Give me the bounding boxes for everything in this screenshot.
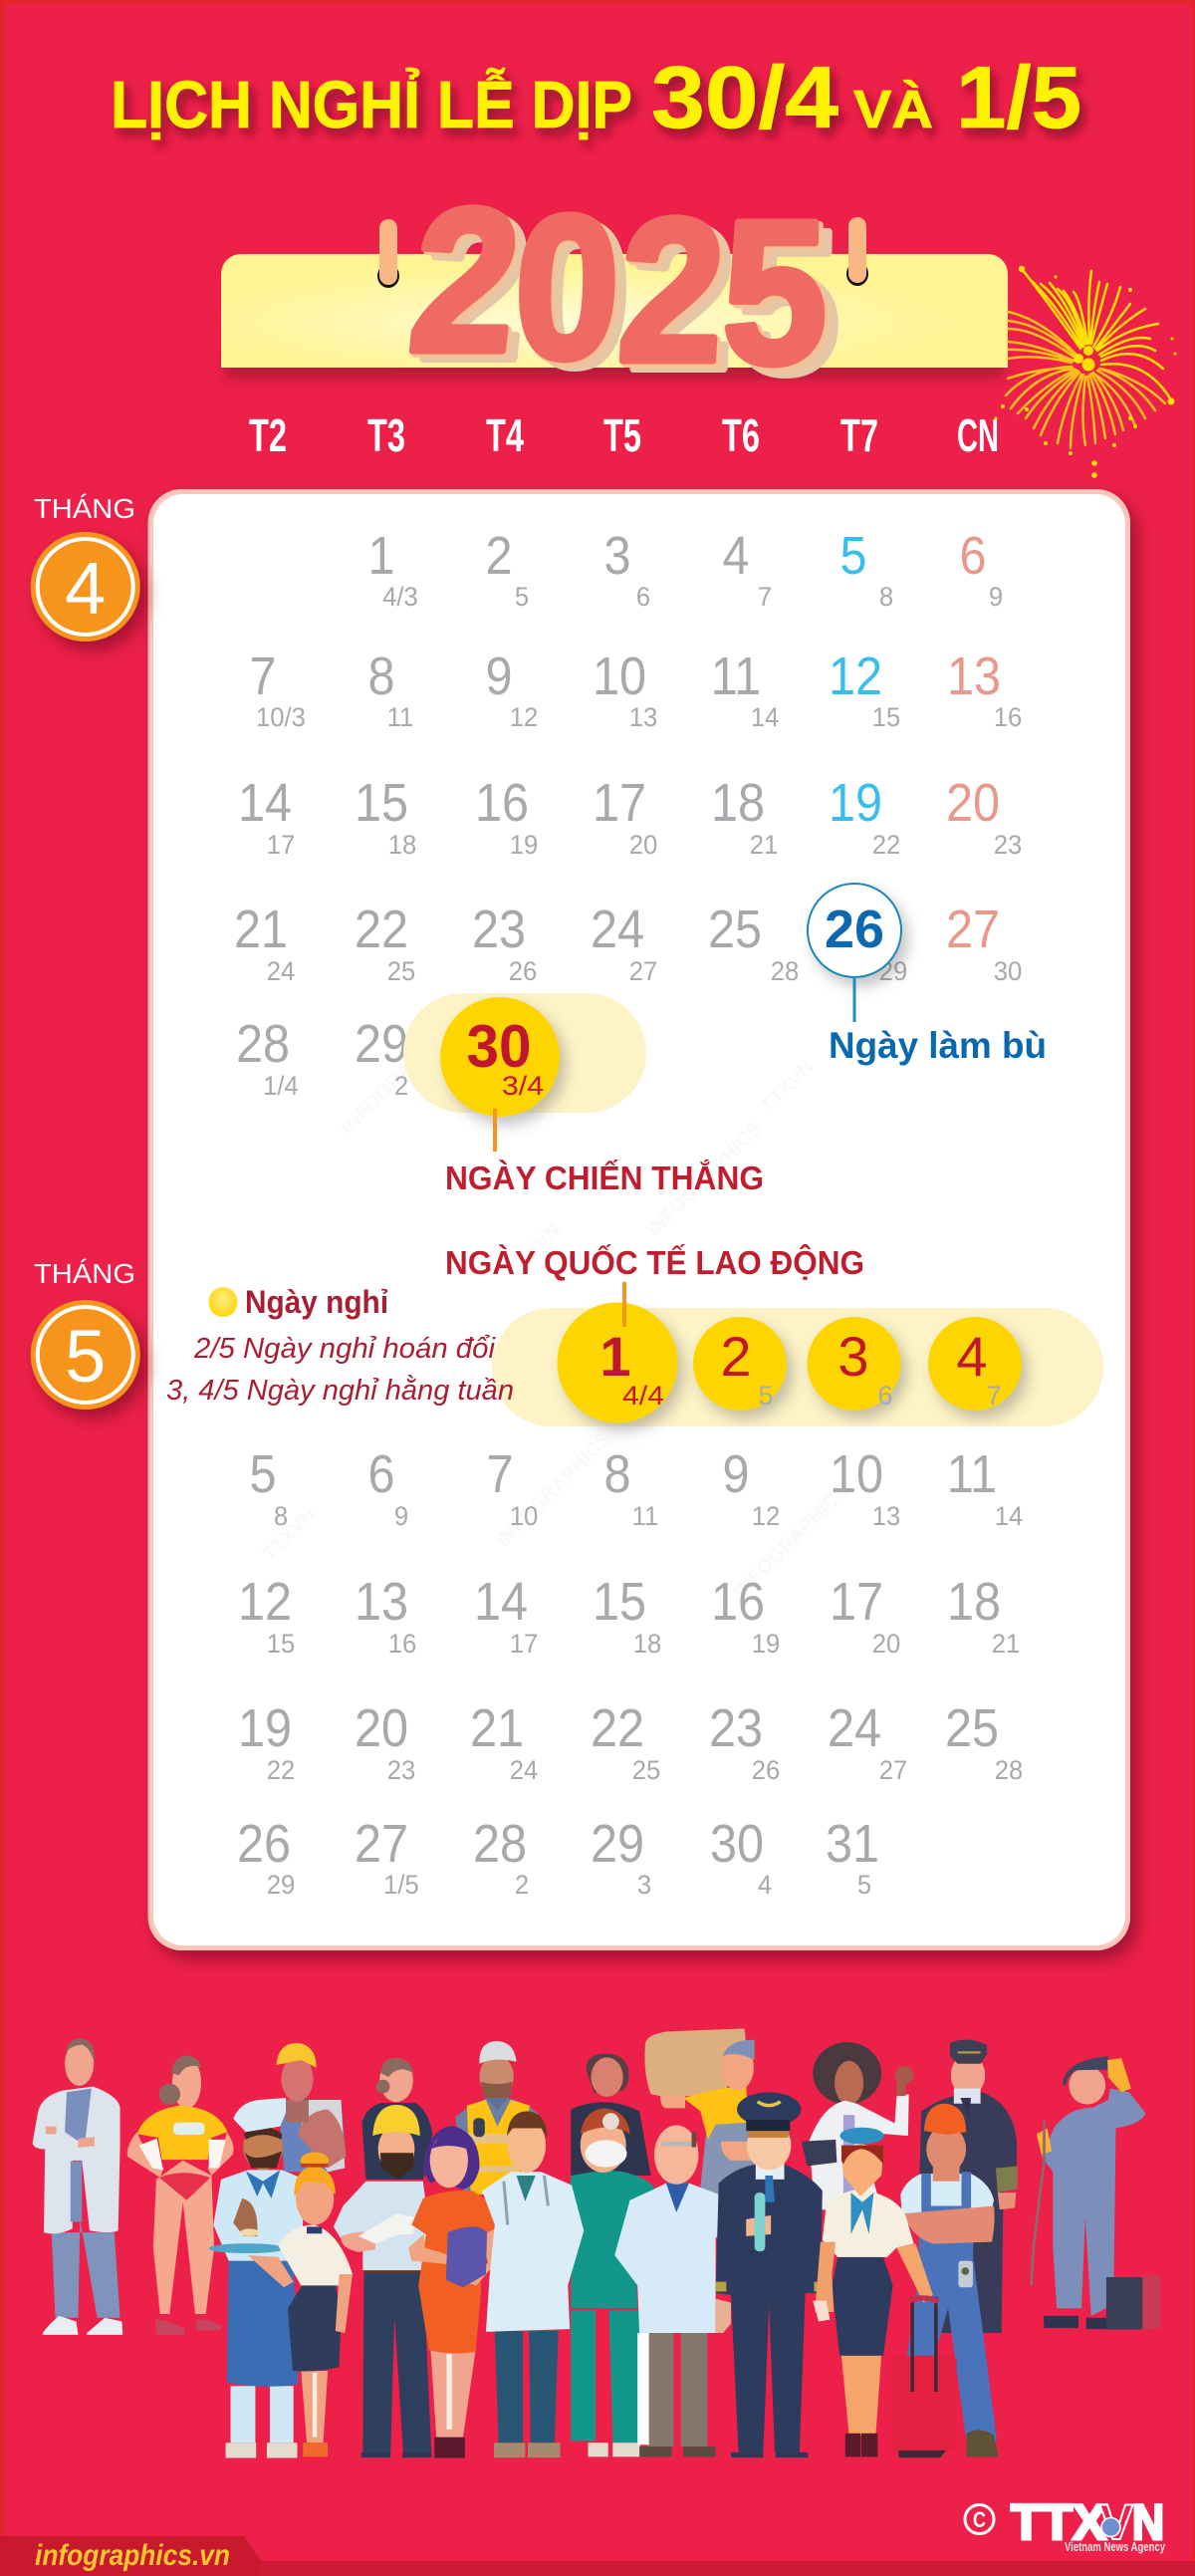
May dates: 13 (355, 1571, 408, 1632)
year 2025: 2 (613, 176, 730, 404)
May dates: 28 (473, 1813, 527, 1874)
April dates: 26 (509, 955, 537, 986)
scientist (614, 2125, 756, 2456)
April dates: 7 (758, 581, 772, 612)
calendar panel: TTXVN (757, 1056, 819, 1118)
May dates: 18 (947, 1571, 1001, 1632)
holiday 1-4 May: 4 (956, 1325, 988, 1388)
April dates: 8 (879, 581, 893, 612)
year 2025: 5 (721, 178, 830, 406)
May dates: 20 (355, 1697, 408, 1758)
April dates: 5 (839, 525, 867, 586)
year 2025: 2 (404, 168, 533, 397)
May dates: 31 (826, 1813, 879, 1874)
April dates: 18 (388, 829, 416, 860)
April dates: 27 (946, 899, 1000, 959)
April dates: 6 (959, 525, 987, 586)
April dates: 14 (751, 701, 779, 732)
title: 30/4 (651, 48, 838, 146)
holiday 1-4 May: 5 (758, 1381, 774, 1411)
April dates: 1/4 (263, 1070, 299, 1101)
May dates: 26 (237, 1813, 291, 1874)
suitcase (891, 2297, 957, 2457)
calendar panel (147, 489, 1130, 1950)
May dates: 4 (758, 1869, 772, 1900)
construction worker with beard (334, 2105, 434, 2457)
April dates: 25 (708, 899, 762, 959)
April dates: 25 (387, 955, 415, 986)
calendar panel: INFOGRAPHICS (730, 1479, 853, 1603)
May dates: 15 (267, 1628, 295, 1659)
May dates: 10 (830, 1443, 883, 1504)
April dates: 10 (593, 645, 646, 706)
May dates: 26 (752, 1754, 780, 1785)
TTXVN logo: TTX (1011, 2494, 1106, 2550)
year 2025: 2 (624, 184, 741, 412)
April dates: 1 (367, 525, 395, 586)
April dates: 12 (510, 701, 538, 732)
May dates: 9 (722, 1443, 750, 1504)
title: LỊCH NGHỈ LỄ DỊP (111, 68, 632, 142)
label: Victory Day: NGÀY CHIẾN THẮNG (445, 1159, 764, 1196)
April dates: 14 (238, 772, 292, 833)
legend: 3, 4/5 Ngày nghỉ hằng tuần (166, 1374, 514, 1407)
woman in dark uniform, back row (362, 2058, 432, 2180)
April dates: 8 (367, 645, 395, 706)
woman in orange dress (408, 2126, 499, 2458)
May dates: 27 (355, 1813, 408, 1874)
April dates: 4 (722, 525, 750, 586)
April dates: 3 (603, 525, 631, 586)
May dates: 2 (515, 1869, 529, 1900)
worker with sack (644, 2028, 756, 2194)
May dates: 23 (709, 1697, 763, 1758)
year 2025: 5 (725, 181, 834, 409)
weekday headers: T6 (722, 409, 760, 461)
TTXVN logo: N (1132, 2494, 1164, 2550)
May dates: 25 (632, 1754, 660, 1785)
April dates: 6 (636, 581, 650, 612)
May dates: 22 (591, 1697, 644, 1758)
May dates: 14 (474, 1571, 528, 1632)
May dates: 30 (710, 1813, 764, 1874)
pilot (716, 2092, 823, 2457)
May dates: 22 (267, 1754, 295, 1785)
May dates: 5 (249, 1443, 277, 1504)
month label: May (31, 1258, 140, 1410)
captain (919, 2039, 1018, 2333)
April dates: 2 (485, 525, 513, 586)
April dates: 28 (236, 1013, 290, 1074)
May dates: 29 (267, 1869, 295, 1900)
April dates: 20 (946, 772, 1000, 833)
nurse with mask (571, 2108, 654, 2456)
May dates: 3 (637, 1869, 651, 1900)
May dates: 29 (591, 1813, 644, 1874)
label: make-up working day: Ngày làm bù (829, 1025, 1047, 1066)
weekday headers: T7 (840, 409, 878, 461)
calendar header banner (221, 217, 1008, 379)
May dates: 13 (872, 1500, 900, 1531)
stewardess (813, 2128, 933, 2456)
holiday 30 April (403, 993, 646, 1152)
month label: May: THÁNG (34, 1258, 135, 1289)
April dates: 29 (879, 955, 907, 986)
year 2025: 2 (412, 173, 541, 402)
holiday 30 April: 3/4 (502, 1071, 544, 1101)
year 2025: 0 (522, 181, 634, 409)
May dates: 1/5 (383, 1869, 419, 1900)
worker in white helmet, back row (455, 2041, 540, 2194)
May dates: 16 (711, 1571, 765, 1632)
May dates: 24 (510, 1754, 538, 1785)
April dates: 15 (872, 701, 900, 732)
April dates: 23 (472, 899, 526, 959)
April dates: 17 (593, 772, 646, 833)
May dates: 17 (510, 1628, 538, 1659)
May dates: 14 (995, 1500, 1023, 1531)
May dates: 24 (828, 1697, 881, 1758)
April dates: 2 (394, 1070, 408, 1101)
April dates: 20 (629, 829, 657, 860)
April dates: 24 (267, 955, 295, 986)
holiday 30 April: 30 (466, 1013, 532, 1080)
TTXVN logo: V (1099, 2494, 1134, 2550)
April dates: 7 (249, 645, 277, 706)
April dates: 21 (750, 829, 778, 860)
May dates: 5 (857, 1869, 871, 1900)
April dates: 22 (872, 829, 900, 860)
April dates (234, 525, 1022, 1101)
April dates: 23 (994, 829, 1022, 860)
April dates: 21 (234, 899, 288, 959)
April dates: 28 (771, 955, 799, 986)
month label: April (31, 493, 140, 642)
calendar panel: INFOGRAPHICS (492, 1428, 615, 1552)
holiday 1-4 May: 3 (837, 1325, 869, 1388)
April dates: 18 (711, 772, 765, 833)
calendar panel: TTXVN (259, 1504, 321, 1566)
May dates: 17 (830, 1571, 883, 1632)
workers illustration, right half (571, 2028, 1160, 2457)
May dates: 16 (388, 1628, 416, 1659)
May dates: 10 (510, 1500, 538, 1531)
April dates: 5 (515, 581, 529, 612)
title: 1/5 (956, 48, 1081, 146)
title: VÀ (853, 80, 933, 139)
May dates: 27 (879, 1754, 907, 1785)
April dates: 19 (510, 829, 538, 860)
weekday headers (249, 409, 999, 461)
holiday 1-4 May: 1 (599, 1325, 631, 1388)
May dates: 6 (367, 1443, 395, 1504)
welder (1032, 2056, 1160, 2330)
month label: May: 5 (65, 1315, 106, 1398)
highlighted working day 26 (808, 884, 901, 1022)
April dates: 13 (947, 645, 1001, 706)
year 2025: 2 (401, 165, 530, 394)
May dates: 21 (470, 1697, 524, 1758)
April dates: 29 (355, 1013, 408, 1074)
May dates: 19 (238, 1697, 292, 1758)
April dates: 27 (629, 955, 657, 986)
weekday headers: T3 (367, 409, 405, 461)
May dates: 11 (632, 1500, 658, 1531)
legend: Ngày nghỉ (245, 1284, 388, 1320)
April dates: 15 (355, 772, 408, 833)
April dates: 22 (355, 899, 408, 959)
back woman (571, 2053, 651, 2176)
May dates (237, 1443, 1023, 1900)
year 2025 (401, 165, 842, 416)
holiday 1-4 May: 2 (720, 1325, 752, 1388)
May dates: 23 (387, 1754, 415, 1785)
fireworks (994, 266, 1177, 478)
holiday 1-4 May: 4/4 (622, 1381, 664, 1411)
May dates: 19 (752, 1628, 780, 1659)
April dates: 19 (829, 772, 882, 833)
doctor, front row (482, 2111, 584, 2457)
waitress (248, 2152, 353, 2456)
year 2025: 2 (616, 179, 733, 407)
May dates: 25 (945, 1697, 999, 1758)
doctor in lab coat (33, 2038, 122, 2335)
month label: April: 4 (65, 547, 106, 630)
holiday 1-4 May (492, 1282, 1103, 1426)
calendar panel: INFOGRAPHICS (337, 1015, 460, 1139)
May dates: 8 (274, 1500, 288, 1531)
May dates: 15 (593, 1571, 646, 1632)
April dates: 10/3 (256, 701, 306, 732)
May dates: 12 (752, 1500, 780, 1531)
April dates: 24 (591, 899, 644, 959)
holiday 1-4 May: 6 (877, 1381, 893, 1411)
April dates: 11 (387, 701, 413, 732)
chef (209, 2098, 305, 2458)
footer tab: infographics.vn (35, 2539, 230, 2572)
May dates: 11 (947, 1443, 997, 1504)
highlighted working day 26: 26 (825, 900, 884, 959)
weekday headers: T5 (603, 409, 641, 461)
April dates: 9 (485, 645, 513, 706)
year 2025: 5 (734, 188, 842, 416)
legend (166, 1284, 514, 1407)
calendar panel: TTXVN (504, 1219, 565, 1281)
weekday headers: T4 (486, 409, 524, 461)
May dates: 9 (394, 1500, 408, 1531)
May dates: 21 (992, 1628, 1020, 1659)
TTXVN logo: C (973, 2507, 986, 2532)
May dates: 20 (872, 1628, 900, 1659)
overalls worker (900, 2104, 999, 2456)
legend: 2/5 Ngày nghỉ hoán đổi (193, 1333, 497, 1365)
month label: April: THÁNG (34, 493, 135, 524)
weekday headers: T2 (249, 409, 287, 461)
workers illustration, left half (33, 2038, 584, 2458)
April dates: 11 (711, 645, 761, 706)
April dates: 30 (994, 955, 1022, 986)
woman with afro (802, 2042, 913, 2209)
May dates: 12 (238, 1571, 292, 1632)
worker in yellow helmet, back row (276, 2043, 346, 2172)
April dates: 13 (629, 701, 657, 732)
April dates: 4/3 (382, 581, 418, 612)
year 2025: 0 (514, 176, 626, 404)
April dates: 17 (267, 829, 295, 860)
title (111, 48, 1081, 146)
April dates: 12 (829, 645, 882, 706)
May dates: 28 (995, 1754, 1023, 1785)
holiday 1-4 May: 7 (986, 1381, 1002, 1411)
April dates: 9 (989, 581, 1003, 612)
weekday headers: CN (957, 409, 999, 461)
label: International Labour Day: NGÀY QUỐC TẾ LAO ĐỘNG (445, 1243, 864, 1281)
April dates: 16 (475, 772, 529, 833)
woman in yellow sportswear (127, 2055, 234, 2335)
year 2025: 0 (511, 173, 623, 401)
May dates: 8 (603, 1443, 631, 1504)
May dates: 7 (486, 1443, 514, 1504)
calendar panel: INFOGRAPHICS (643, 1118, 767, 1241)
May dates: 18 (633, 1628, 661, 1659)
TTXVN logo (965, 2494, 1166, 2554)
April dates: 16 (994, 701, 1022, 732)
